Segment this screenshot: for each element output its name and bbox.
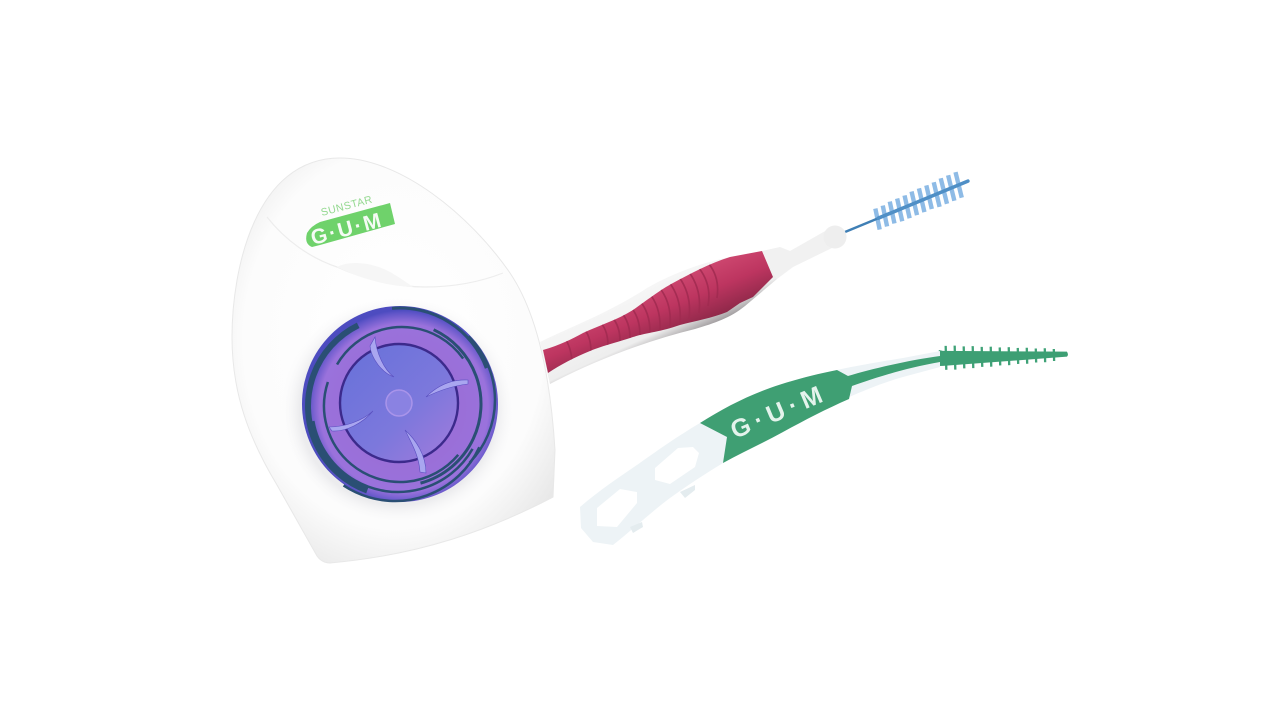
floss dispenser xyxy=(232,158,555,563)
cap seam xyxy=(267,217,503,287)
green soft pick xyxy=(580,343,1068,545)
brush wire and bristles xyxy=(840,169,973,244)
brush neck xyxy=(762,230,843,279)
disc centre xyxy=(340,344,458,462)
pick white body xyxy=(580,351,940,545)
logo xyxy=(306,194,395,250)
floss disc xyxy=(271,273,532,532)
disc spokes xyxy=(329,337,468,473)
disc recess xyxy=(278,294,518,526)
brush handle white body xyxy=(540,251,777,384)
interdental brush xyxy=(540,169,973,384)
grip ridges xyxy=(566,264,718,365)
brush handle red grip xyxy=(543,251,773,373)
brush neck ball xyxy=(824,226,846,248)
dispenser shell xyxy=(232,158,555,563)
logo SUNSTAR: SUNSTAR xyxy=(320,194,374,219)
pick GUM text: G·U·M xyxy=(726,379,832,445)
product illustration xyxy=(232,158,1068,564)
floss windings xyxy=(271,273,532,532)
logo GUM: G·U·M xyxy=(308,208,386,250)
cap highlight xyxy=(337,263,413,287)
logo badge xyxy=(306,203,395,247)
pick tabs xyxy=(630,485,695,533)
pick green grip xyxy=(700,356,940,463)
disc hub xyxy=(386,390,412,416)
pick head with spikes xyxy=(939,343,1068,370)
